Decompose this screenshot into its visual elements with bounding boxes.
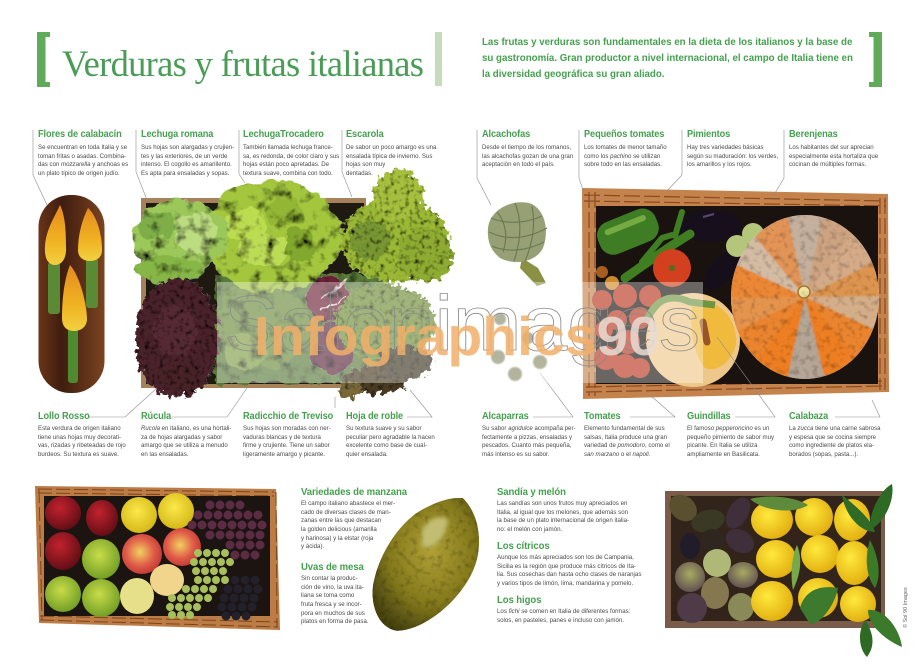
Romana lettuce bbox=[132, 200, 228, 283]
text: Variedades de manzana: El campo italiano abastece el mer- bbox=[301, 500, 395, 507]
dark figs bbox=[664, 489, 758, 559]
title: Verduras y frutas italianas bbox=[62, 43, 424, 84]
text: Alcaparras: Su sabor agridulce acompaña per- bbox=[482, 425, 576, 432]
text: Calabaza bbox=[789, 411, 880, 458]
text: Radicchio de Treviso: firme y crujiente. Tiene un sabor bbox=[243, 442, 330, 449]
text: Calabaza: borados (sopas, pasta...). bbox=[789, 450, 858, 458]
intro text: Las frutas y verduras son fundamentales en la dieta de los italianos y la base de bbox=[482, 37, 852, 48]
text: Sandía y melón: la base de un plato internacional de origen italia- bbox=[497, 517, 629, 524]
panel: apple and grape basket bbox=[35, 486, 280, 630]
text: Flores de calabacín bbox=[38, 129, 128, 176]
text: Berenjenas: cocinan de múltiples formas. bbox=[789, 161, 866, 168]
text: Escarola: Escarola bbox=[346, 129, 384, 140]
green chilli peppers bbox=[625, 212, 690, 278]
text: Lollo Rosso: burdeos. Su textura es suave. bbox=[38, 450, 119, 458]
text: Lechuga romana: Es apta para ensaladas y sopas. bbox=[141, 170, 229, 176]
text: Los cítricos: Los cítricos bbox=[497, 541, 550, 552]
title bracket left bbox=[37, 32, 50, 87]
text: Radicchio de Treviso bbox=[243, 411, 333, 458]
text: Guindillas: pequeño pimiento de sabor muy bbox=[687, 434, 774, 440]
Hoja de roble bbox=[338, 346, 433, 398]
text: Berenjenas: Los habitantes del sur aprecian bbox=[789, 144, 874, 151]
text: Guindillas: Guindillas bbox=[687, 411, 731, 422]
watermark band bbox=[217, 282, 703, 383]
text: Lollo Rosso bbox=[38, 411, 126, 458]
text: Hoja de roble bbox=[346, 411, 435, 458]
text: Uvas de mesa: liana se toma como bbox=[301, 592, 354, 599]
text: Sandía y melón: Las sandías son unos frutos muy apreciados en bbox=[497, 500, 627, 507]
text: Alcaparras bbox=[482, 411, 576, 458]
melon bbox=[372, 498, 479, 631]
green pepper bbox=[593, 204, 663, 259]
text: Uvas de mesa: pora en muchos de sus bbox=[301, 610, 365, 617]
text: Guindillas: picante. En Italia se utiliza bbox=[687, 442, 757, 449]
text: Flores de calabacín: Se encuentran en toda Italia y se bbox=[38, 144, 127, 151]
text: Berenjenas: especialmente esta hortaliza que bbox=[789, 152, 878, 160]
text: Variedades de manzana: zanas entre las que destacan bbox=[301, 517, 381, 524]
text: Los cítricos: Sicilia es la región que produce más cítricos de Ita- bbox=[497, 563, 636, 570]
Escarola bbox=[341, 169, 453, 282]
text: Variedades de manzana: Variedades de manzana bbox=[301, 487, 407, 498]
text: Hoja de roble: Hoja de roble bbox=[346, 411, 403, 422]
text: Pimientos: los amarillos y los rojos. bbox=[687, 161, 752, 168]
text: Berenjenas bbox=[789, 129, 878, 168]
text: Sandía y melón: Italia, al igual que los melones, que además son bbox=[497, 509, 628, 516]
text: Alcaparras: fectamente a pizzas, ensaladas y bbox=[482, 434, 572, 440]
text: Los cítricos: y varios tipos de limón, lima, mandarina y pomelo. bbox=[497, 580, 633, 587]
text: Guindillas: ampliamente en Basilicata. bbox=[687, 450, 760, 458]
text: Escarola: hojas son muy bbox=[346, 161, 385, 168]
text: Variedades de manzana: y harinosa) y la elstar (roja bbox=[301, 535, 373, 542]
text: Calabaza: Calabaza bbox=[789, 411, 828, 422]
text: Lechuga Trocadero: sa, es redonda, de color claro y sus bbox=[243, 152, 339, 160]
text: Radicchio de Treviso: Sus hojas son moradas con ner- bbox=[243, 425, 331, 432]
text: Rúcula: amargo que se utiliza a menudo bbox=[141, 442, 228, 449]
text: Tomates: san marzano o el napoli. bbox=[584, 450, 650, 458]
text: Lollo Rosso: Esta verdura de origen italiano bbox=[38, 425, 121, 432]
text: Hoja de roble: peculiar pero agradable la hacen bbox=[346, 434, 435, 440]
small tomatoes bbox=[592, 266, 661, 378]
text: Uvas de mesa: Uvas de mesa bbox=[301, 562, 364, 573]
text: Tomates bbox=[584, 411, 670, 458]
text: Lechuga Trocadero: También llamada lechuga france- bbox=[243, 144, 333, 151]
copyright credit: © Sol 90 Images bbox=[902, 587, 909, 628]
text: Alcachofas: las alcachofas gozan de una gran bbox=[482, 152, 573, 160]
text: Flores de calabacín: un plato típico de origen judío. bbox=[38, 170, 120, 176]
text: Rúcula: Rucola en italiano, es una hortali- bbox=[141, 425, 231, 432]
text: Sandía y melón: no: el melón con jamón. bbox=[497, 526, 562, 533]
green grapes bbox=[170, 553, 236, 615]
icon: artichoke bbox=[488, 202, 547, 286]
lemons bbox=[751, 498, 876, 622]
text: Los higos: Los fichi se comen en Italia de diferentes formas: bbox=[497, 608, 630, 615]
text: Uvas de mesa: ción de vino, la uva ita- bbox=[301, 584, 364, 591]
text: Flores de calabacín: toman fritas o asadas. Combina- bbox=[38, 152, 126, 160]
text: Tomates: variedad de pomodoro, como el bbox=[584, 442, 670, 449]
squash half bbox=[646, 293, 740, 387]
text: Uvas de mesa: platos en forma de pasa. bbox=[301, 618, 369, 625]
text: Radicchio de Treviso: vaduras blancas y de textura bbox=[243, 434, 321, 440]
icon: zucchini flower right bbox=[78, 208, 102, 308]
pale figs bbox=[675, 549, 758, 623]
Radicchio and band greens base bbox=[215, 275, 390, 383]
text: Hoja de roble: Su textura suave y su sabor bbox=[346, 425, 422, 432]
text: Hoja de roble: quier ensalada. bbox=[346, 450, 388, 458]
citrus leaves bbox=[750, 484, 902, 657]
panel: zucchini flowers on wooden board bbox=[38, 195, 104, 393]
intro text: su gastronomía. Gran productor a nivel internacional, el campo de Italia tiene en bbox=[482, 53, 853, 64]
text: Flores de calabacín: das con mozzarella y anchoas es bbox=[38, 161, 128, 168]
text: Alcaparras: Alcaparras bbox=[482, 411, 529, 422]
text: Los cítricos: Aunque los más apreciados son los de Campania, bbox=[497, 554, 634, 561]
text: Calabaza: como ingrediente de platos ela- bbox=[789, 442, 874, 449]
text: Los higos: Los higos bbox=[497, 595, 541, 606]
text: Lechuga Trocadero: hojas están poco apretadas. De bbox=[243, 161, 329, 168]
text: Rúcula: en las ensaladas. bbox=[141, 450, 188, 458]
text: Lechuga romana: Lechuga romana bbox=[141, 129, 213, 140]
text: Alcaparras: pescados. Cuanto más pequeña, bbox=[482, 442, 571, 449]
text: Variedades de manzana: cado de diversas clases de man- bbox=[301, 509, 391, 516]
text: Pimientos: Pimientos bbox=[687, 129, 730, 140]
purple grapes bbox=[192, 505, 266, 555]
text: Alcachofas: Desde el tiempo de los romanos, bbox=[482, 144, 571, 151]
text: Rúcula bbox=[141, 411, 232, 458]
text: Variedades de manzana: la golden delicious (amarilla bbox=[301, 526, 377, 533]
text: Rúcula: Rúcula bbox=[141, 411, 171, 422]
text: Escarola: De sabor un poco amargo es una bbox=[346, 144, 436, 151]
text: Rúcula: za de hojas alargadas y sabor bbox=[141, 434, 222, 440]
text: Lechuga romana: Sus hojas son alargadas y crujien- bbox=[141, 144, 234, 151]
text: Los cítricos: lia. Sus cosechas dan hasta ocho clases de naranjas bbox=[497, 571, 641, 578]
text: Los higos bbox=[497, 595, 630, 624]
text: Sandía y melón: Sandía y melón bbox=[497, 487, 566, 498]
connector lines bbox=[33, 130, 880, 417]
text: Guindillas: El famoso pepperoncino es un bbox=[687, 425, 769, 432]
text: Alcachofas bbox=[482, 129, 573, 168]
crate board bbox=[141, 198, 366, 388]
Lollo Rosso bbox=[135, 278, 219, 398]
text: Lechuga Trocadero: LechugaTrocadero bbox=[243, 129, 324, 140]
eggplant caps bbox=[726, 223, 764, 257]
text: Lechuga romana: tes y las exteriores, de un verde bbox=[141, 152, 227, 160]
text: Tomates: Elemento fundamental de sus bbox=[584, 425, 665, 432]
text: Escarola bbox=[346, 129, 436, 176]
text: Alcaparras: más intenso es su sabor. bbox=[482, 450, 549, 458]
watermark bold text: Infographics90 bbox=[254, 305, 660, 367]
text: Pequeños tomates bbox=[584, 129, 667, 168]
title bar right bbox=[435, 32, 442, 86]
text: Radicchio de Treviso: ligeramente amargo y picante. bbox=[243, 450, 325, 458]
text: Sandía y melón bbox=[497, 487, 629, 533]
tomato bbox=[653, 249, 691, 287]
text: Variedades de manzana: y ácida). bbox=[301, 543, 324, 550]
text: Lechuga romana: intenso. El cogollo es amarillento. bbox=[141, 161, 232, 168]
text: Los cítricos bbox=[497, 541, 642, 587]
text: Alcachofas: Alcachofas bbox=[482, 129, 530, 140]
apples bbox=[45, 493, 201, 617]
text: Tomates: salsas, Italia produce una gran bbox=[584, 434, 667, 440]
eggplant bbox=[677, 210, 746, 295]
text: Lollo Rosso: tiene unas hojas muy decorati- bbox=[38, 434, 121, 440]
text: Pimientos: Hay tres variedades básicas bbox=[687, 144, 764, 151]
text: Lollo Rosso: Lollo Rosso bbox=[38, 411, 90, 422]
text: Pequeños tomates: sobre todo en las ensaladas. bbox=[584, 161, 662, 168]
text: Lechuga Trocadero bbox=[243, 129, 339, 176]
text: Lechuga Trocadero: textura suave, combina con todo. bbox=[243, 170, 333, 176]
watermark outline text: Salonimages bbox=[224, 279, 700, 367]
text: Lechuga romana bbox=[141, 129, 234, 176]
text: Uvas de mesa: fruta fresca y se incor- bbox=[301, 601, 362, 608]
Radicchio bbox=[304, 278, 352, 376]
text: Escarola: ensalada típica de invierno. Sus bbox=[346, 152, 432, 160]
text: Radicchio de Treviso: Radicchio de Treviso bbox=[243, 411, 333, 422]
black grapes bbox=[222, 580, 266, 616]
text: Calabaza: La zucca tiene una carne sabrosa bbox=[789, 425, 880, 432]
text: Uvas de mesa bbox=[301, 562, 369, 625]
lower right green bbox=[335, 284, 435, 360]
text: Los higos: solos, en pasteles, panes e incluso con jamón. bbox=[497, 617, 624, 624]
text: Variedades de manzana bbox=[301, 487, 408, 550]
text: Uvas de mesa: Sin contar la produc- bbox=[301, 575, 358, 582]
text: Escarola: dentadas. bbox=[346, 170, 373, 176]
pale chilli bbox=[648, 298, 715, 318]
text: Hoja de roble: excelente como base de cual- bbox=[346, 442, 427, 449]
text: Flores de calabacín: Flores de calabacín bbox=[38, 129, 122, 140]
closing bracket bbox=[869, 32, 882, 87]
icon: zucchini flower left bbox=[45, 205, 66, 314]
text: Pequeños tomates: Pequeños tomates bbox=[584, 129, 664, 140]
text: Pimientos bbox=[687, 129, 778, 168]
panel: figs and lemons crate bbox=[664, 484, 902, 657]
text: Pequeños tomates: Los tomates de menor tamaño bbox=[584, 144, 667, 151]
panel: vegetable basket bbox=[582, 188, 898, 399]
panel: lettuce crate bbox=[132, 169, 453, 398]
basket frame bbox=[582, 188, 889, 399]
text: Calabaza: y espesa que se cocina siempre bbox=[789, 434, 876, 440]
text: Pequeños tomates: como los pachino se utilizan bbox=[584, 152, 660, 160]
intro text: la diversidad geográfica su gran aliado. bbox=[482, 69, 665, 80]
text: Berenjenas: Berenjenas bbox=[789, 129, 838, 140]
Trocadero lettuce bbox=[204, 180, 340, 292]
icon: capers bbox=[491, 313, 547, 381]
pumpkin bbox=[731, 215, 879, 379]
text: Pimientos: según su maduración: los verdes, bbox=[687, 152, 778, 160]
intro text bbox=[482, 37, 853, 80]
text: Tomates: Tomates bbox=[584, 411, 621, 422]
icon: zucchini flower centre bbox=[62, 265, 87, 383]
text: Lollo Rosso: vas, rizadas y ribeteadas de rojo bbox=[38, 442, 126, 449]
text: Guindillas bbox=[687, 411, 774, 458]
text: Alcachofas: aceptación en todo el país. bbox=[482, 161, 555, 168]
